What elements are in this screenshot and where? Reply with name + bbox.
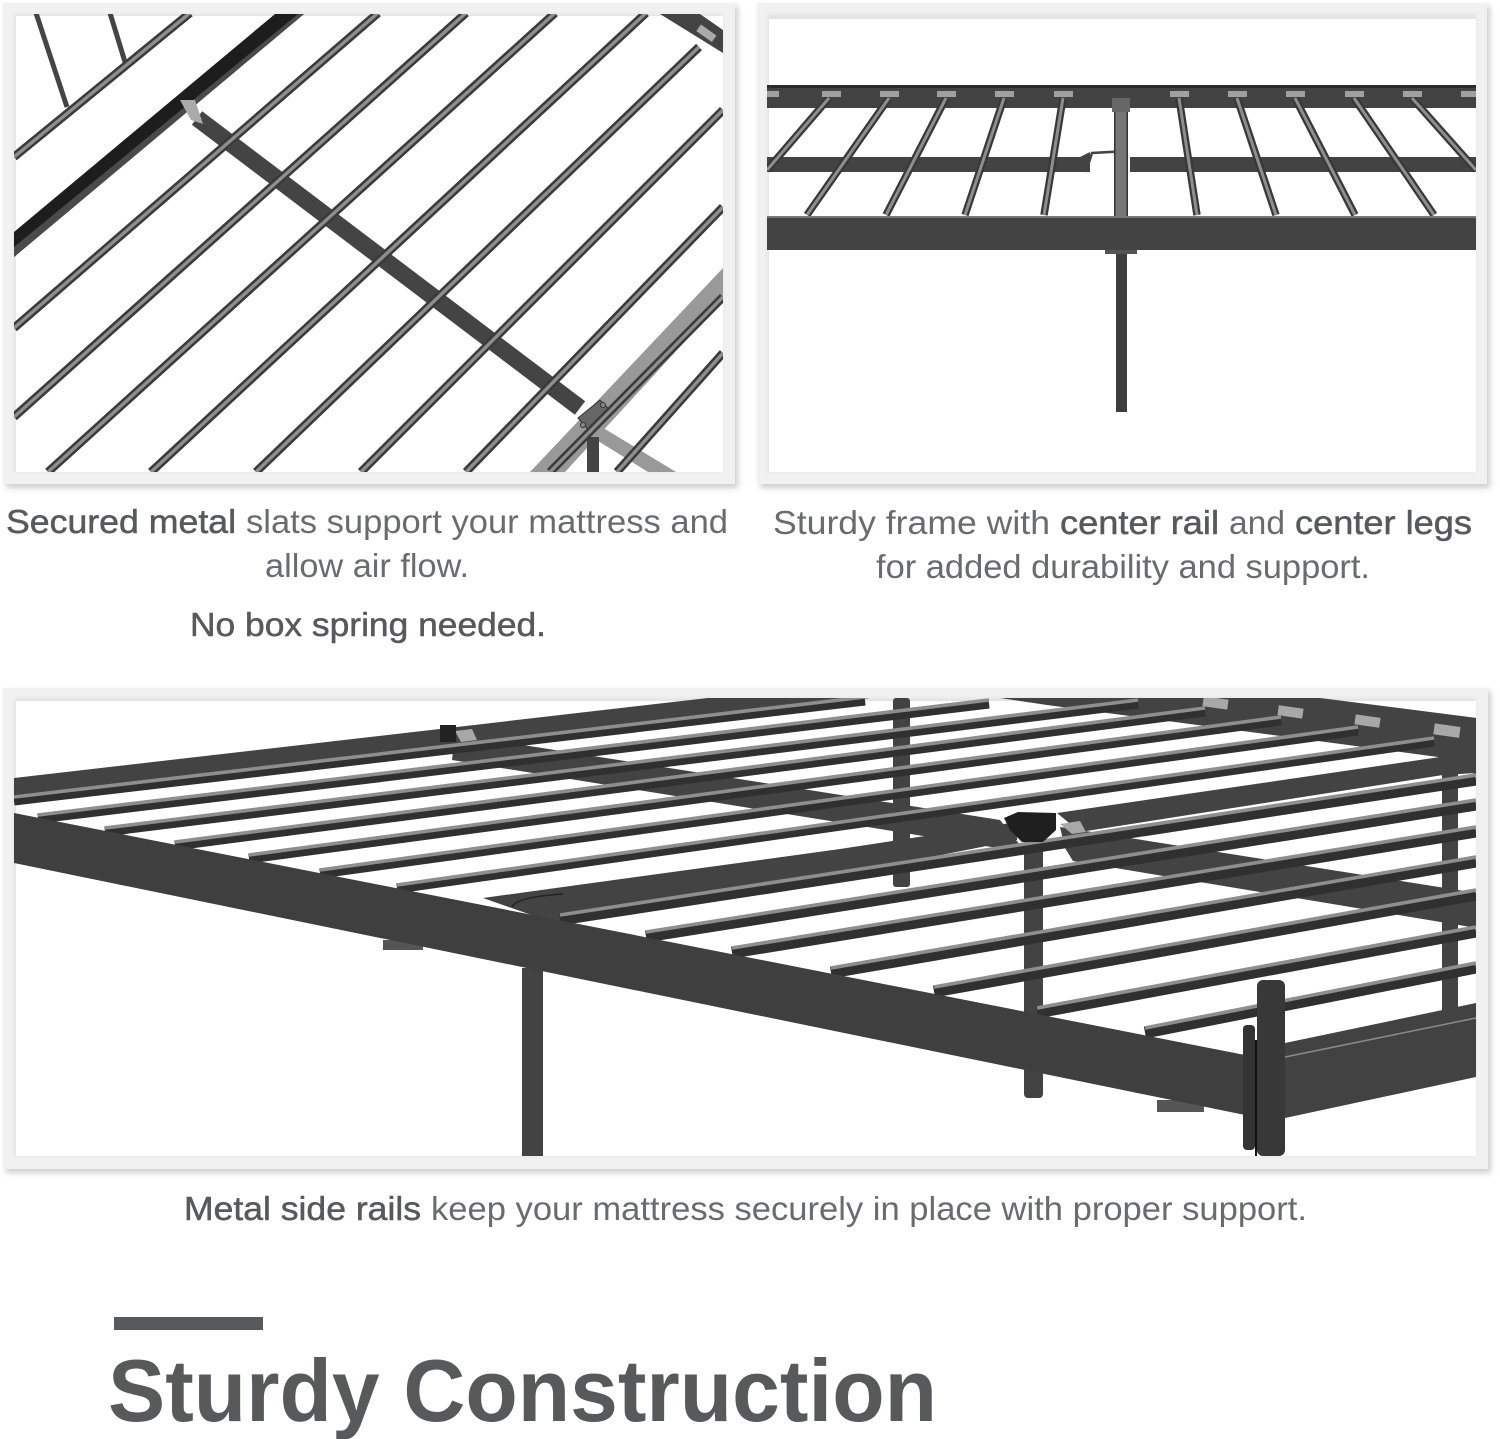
panel: secured metal slats photo [3,3,738,488]
caption: center rail and legs [773,504,1472,585]
caption: center rail and legs: and [1229,504,1285,541]
illustration: full bed frame perspective [14,696,1477,1156]
illustration: slats seen from above [14,13,723,472]
caption: metal side rails: keep your mattress securely in place with proper support. [431,1190,1307,1227]
heading accent bar [114,1317,263,1330]
illustration: bed frame front view [765,85,1476,412]
panel: center rail and center leg photo [757,3,1490,488]
caption: center rail and legs: for added durability and support. [876,548,1370,585]
caption: metal side rails: Metal side rails [184,1190,421,1227]
caption: center rail and legs: center legs [1295,504,1472,541]
caption: secured metal slats: slats support your mattress and [246,503,728,540]
caption: secured metal slats [6,503,728,643]
caption: secured metal slats: Secured metal [6,503,236,540]
caption: secured metal slats: allow air flow. [265,547,469,584]
caption: center rail and legs: Sturdy frame with [773,504,1050,541]
caption: secured metal slats: No box spring needed. [190,606,546,643]
title: Sturdy Construction [108,1341,937,1439]
caption: center rail and legs: center rail [1060,504,1219,541]
panel: metal side rails photo [3,688,1491,1173]
